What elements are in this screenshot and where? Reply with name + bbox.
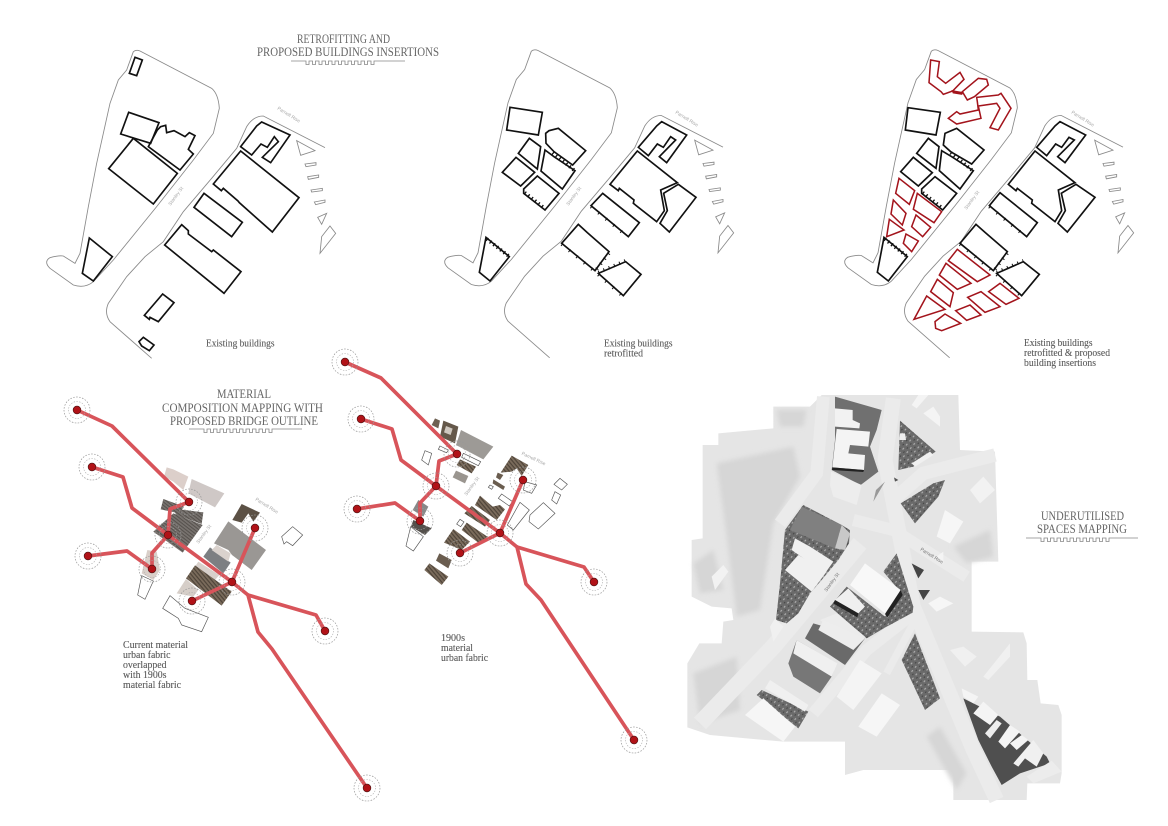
street label: Parnell Rise: Parnell Rise <box>919 547 944 566</box>
caption <box>1024 338 1110 369</box>
caption: Existing buildings <box>1024 338 1093 349</box>
proposed insertions south <box>914 249 1019 331</box>
caption <box>123 640 188 691</box>
bridge outline <box>77 410 367 788</box>
caption: retrofitted <box>604 348 643 360</box>
retrofitted building footprints <box>479 107 696 297</box>
heading: underutilised spaces mapping <box>1026 509 1138 542</box>
street label: Stanley St: Stanley St <box>963 189 981 211</box>
heading: retrofitting and proposed buildings insertions <box>257 32 439 64</box>
panel: existing buildings <box>47 50 336 358</box>
site plan outline <box>445 50 734 358</box>
heading: underutilised spaces mapping: SPACES MAPPING <box>1037 522 1127 536</box>
panel: underutilised spaces aerial map <box>687 395 1062 800</box>
site plan outline <box>845 50 1134 358</box>
aerial base <box>687 395 1062 800</box>
existing building footprints <box>82 57 299 351</box>
panel: existing buildings retrofitted <box>445 50 734 360</box>
caption: with 1900s <box>123 670 167 681</box>
underutilised dark patches and buildings <box>712 395 1010 742</box>
heading: material composition mapping <box>162 387 323 432</box>
caption: Current material <box>123 640 188 651</box>
street label: Parnell Rise: Parnell Rise <box>254 497 279 516</box>
bridge nodes <box>332 349 647 753</box>
tree canopy <box>693 410 993 790</box>
street label: Stanley St: Stanley St <box>565 185 583 207</box>
southeast underutilised cluster <box>962 688 1062 785</box>
heading: underutilised spaces mapping: UNDERUTILISED <box>1041 509 1124 523</box>
caption: material <box>441 643 473 654</box>
caption: building insertions <box>1024 358 1096 369</box>
heading: retrofitting and proposed buildings insertions: RETROFITTING AND <box>297 32 390 46</box>
heading: material composition mapping: COMPOSITION MAPPING WITH <box>162 401 323 415</box>
heading: material composition mapping: MATERIAL <box>217 387 271 401</box>
street label: Stanley St: Stanley St <box>463 475 481 497</box>
retained building footprints <box>877 108 1095 297</box>
caption: urban fabric <box>123 650 171 661</box>
bridge nodes <box>64 397 380 801</box>
caption <box>441 633 489 664</box>
caption: 1900s <box>441 633 465 644</box>
street label: Stanley St: Stanley St <box>823 571 841 593</box>
caption <box>604 338 673 360</box>
caption: Existing buildings <box>206 338 275 350</box>
material map <box>138 467 303 632</box>
street label: Stanley St: Stanley St <box>195 523 213 545</box>
bridge outline <box>345 362 634 740</box>
site plan outline <box>47 50 336 358</box>
roads <box>700 397 997 800</box>
street label: Parnell Rise: Parnell Rise <box>674 110 699 129</box>
caption: urban fabric <box>441 653 489 664</box>
panel: retrofitted and proposed building insertions <box>845 50 1134 369</box>
proposed insertions north <box>929 60 1011 130</box>
caption: overlapped <box>123 660 166 671</box>
proposed insertions west <box>887 178 942 252</box>
caption: retrofitted & proposed <box>1024 348 1110 359</box>
panel: 1900s material urban fabric with bridge <box>332 349 647 753</box>
material map <box>406 418 567 585</box>
heading: material composition mapping: PROPOSED BRIDGE OUTLINE <box>170 414 318 428</box>
caption: Existing buildings <box>604 338 673 350</box>
street label: Stanley St: Stanley St <box>167 185 185 207</box>
panel: current material urban fabric with bridge <box>64 397 380 801</box>
heading: retrofitting and proposed buildings insertions: PROPOSED BUILDINGS INSERTIONS <box>257 45 439 59</box>
street label: Parnell Rise: Parnell Rise <box>1070 110 1095 129</box>
street label: Parnell Rise: Parnell Rise <box>520 451 547 467</box>
street label: Parnell Rise: Parnell Rise <box>276 106 301 125</box>
caption: material fabric <box>123 680 182 691</box>
